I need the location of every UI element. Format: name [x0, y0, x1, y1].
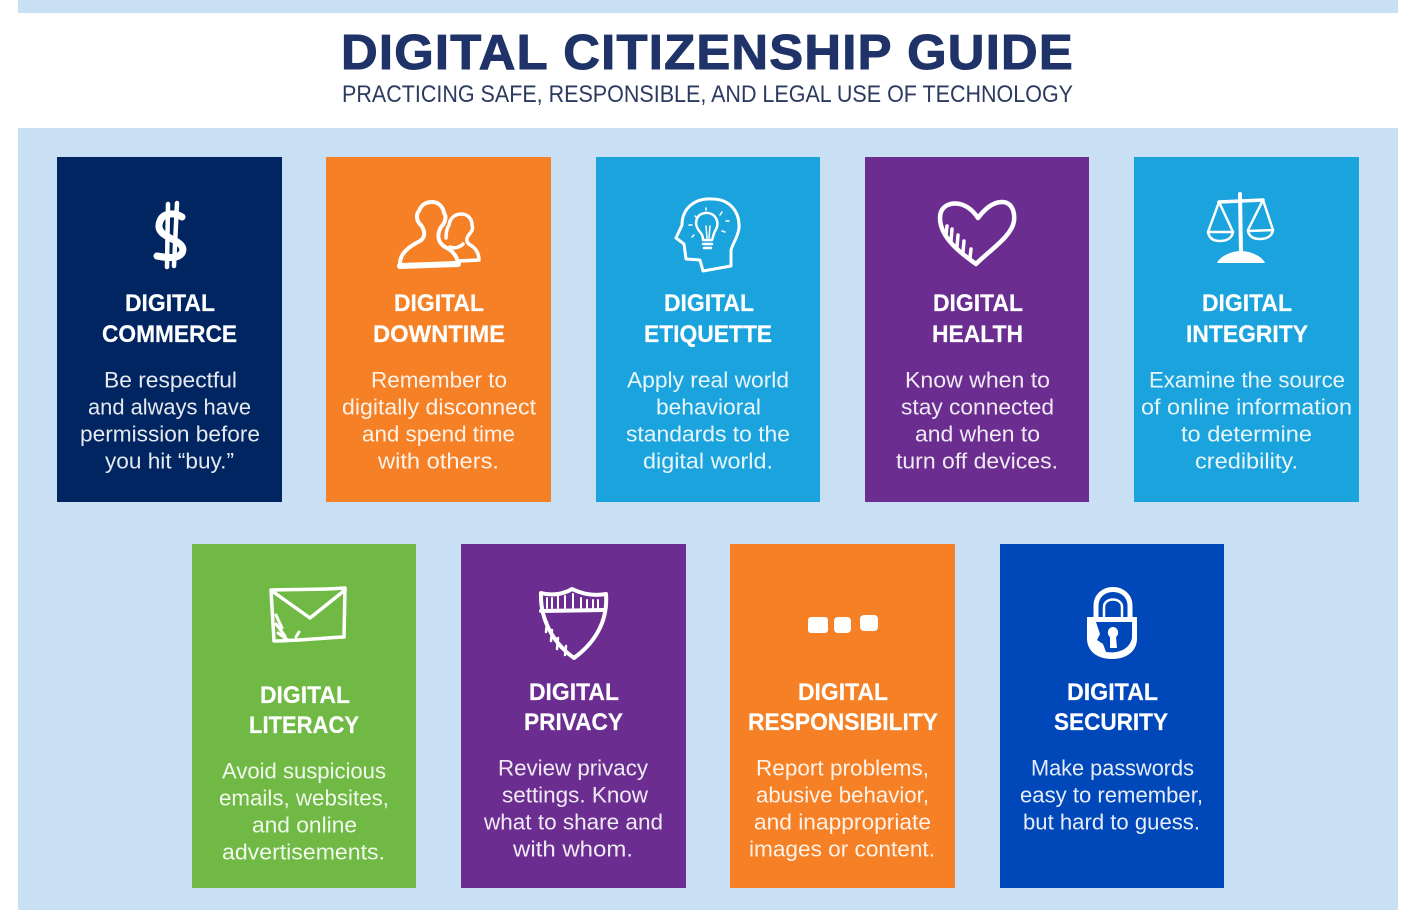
heading: DIGITAL	[1067, 679, 1158, 706]
icon: scales	[1208, 194, 1273, 263]
heading	[748, 679, 938, 736]
icon: padlock	[1087, 590, 1137, 659]
heading: LITERACY	[249, 712, 359, 739]
heading	[524, 679, 623, 736]
body text: standards to the	[626, 421, 790, 446]
body text	[483, 755, 663, 861]
body text: advertisements.	[222, 839, 385, 864]
subtitle: PRACTICING SAFE, RESPONSIBLE, AND LEGAL USE OF TECHNOLOGY	[342, 81, 1073, 108]
panel: digital literacy	[192, 544, 416, 888]
panel: digital health	[865, 157, 1089, 502]
icon: head with light bulb	[676, 199, 739, 271]
body text: Examine the source	[1149, 367, 1345, 392]
body text: stay connected	[901, 394, 1054, 419]
heading	[932, 290, 1023, 348]
panel: digital etiquette	[596, 157, 820, 502]
body text: Be respectful	[104, 367, 237, 392]
body text: Apply real world	[627, 367, 789, 392]
heading	[249, 682, 359, 739]
body text: to determine	[1181, 421, 1312, 446]
top strip	[18, 0, 1398, 13]
body text: settings. Know	[502, 782, 649, 807]
heading: INTEGRITY	[1186, 321, 1308, 348]
body text: Remember to	[371, 367, 507, 392]
panel: digital responsibility	[730, 544, 955, 888]
heading: SECURITY	[1054, 709, 1168, 736]
icon: people	[400, 202, 479, 266]
panel: digital privacy	[461, 544, 686, 888]
icon: heart	[940, 202, 1014, 264]
heading: DIGITAL	[529, 679, 619, 706]
body text: Know when to	[905, 367, 1050, 392]
heading: DIGITAL	[933, 290, 1023, 317]
panel: digital downtime	[326, 157, 551, 502]
heading	[1054, 679, 1168, 736]
body text: credibility.	[1195, 448, 1298, 473]
body text	[1141, 367, 1352, 473]
body text: digitally disconnect	[342, 394, 537, 419]
heading: DIGITAL	[664, 290, 754, 317]
heading: DIGITAL	[798, 679, 888, 706]
panel: digital commerce	[57, 157, 282, 502]
body text: with others.	[377, 448, 499, 473]
body text: with whom.	[512, 836, 633, 861]
heading: RESPONSIBILITY	[748, 709, 938, 736]
body text: turn off devices.	[896, 448, 1058, 473]
heading: COMMERCE	[102, 321, 237, 348]
body text: images or content.	[749, 836, 935, 861]
heading: DIGITAL	[394, 290, 484, 317]
heading: DIGITAL	[260, 682, 350, 709]
body text: what to share and	[483, 809, 663, 834]
heading: PRIVACY	[524, 709, 623, 736]
icon: envelope	[271, 588, 345, 641]
body text: digital world.	[643, 448, 773, 473]
icon: dollar sign	[157, 203, 183, 267]
heading	[1186, 290, 1308, 348]
body text: and inappropriate	[754, 809, 931, 834]
body text: Report problems,	[756, 755, 929, 780]
heading	[102, 290, 237, 348]
heading	[644, 290, 772, 348]
body text: abusive behavior,	[756, 782, 929, 807]
body text	[1020, 755, 1203, 834]
body text: Avoid suspicious	[222, 758, 386, 783]
body text: and when to	[915, 421, 1040, 446]
icon: shield	[541, 589, 606, 658]
body text: you hit “buy.”	[105, 448, 234, 473]
body text: Make passwords	[1031, 755, 1194, 780]
body text: of online information	[1141, 394, 1352, 419]
heading: HEALTH	[932, 321, 1023, 348]
heading	[373, 290, 505, 348]
body text	[342, 367, 537, 473]
body text: emails, websites,	[219, 785, 389, 810]
body text: and spend time	[362, 421, 515, 446]
panel: digital integrity	[1134, 157, 1359, 502]
icon: three squares	[808, 615, 878, 633]
body text: behavioral	[656, 394, 761, 419]
body text: and always have	[88, 394, 251, 419]
body text: easy to remember,	[1020, 782, 1203, 807]
body text: but hard to guess.	[1023, 809, 1200, 834]
body text	[626, 367, 790, 473]
body text	[219, 758, 389, 864]
heading: ETIQUETTE	[644, 321, 772, 348]
heading: DIGITAL	[125, 290, 215, 317]
body text: and online	[252, 812, 357, 837]
body text	[896, 367, 1058, 473]
heading: DIGITAL	[1202, 290, 1292, 317]
title: DIGITAL CITIZENSHIP GUIDE	[341, 26, 1074, 80]
body text	[749, 755, 935, 861]
heading: DOWNTIME	[373, 321, 505, 348]
panel: digital security	[1000, 544, 1224, 888]
body text	[80, 367, 260, 473]
body text: permission before	[80, 421, 260, 446]
body text: Review privacy	[498, 755, 649, 780]
